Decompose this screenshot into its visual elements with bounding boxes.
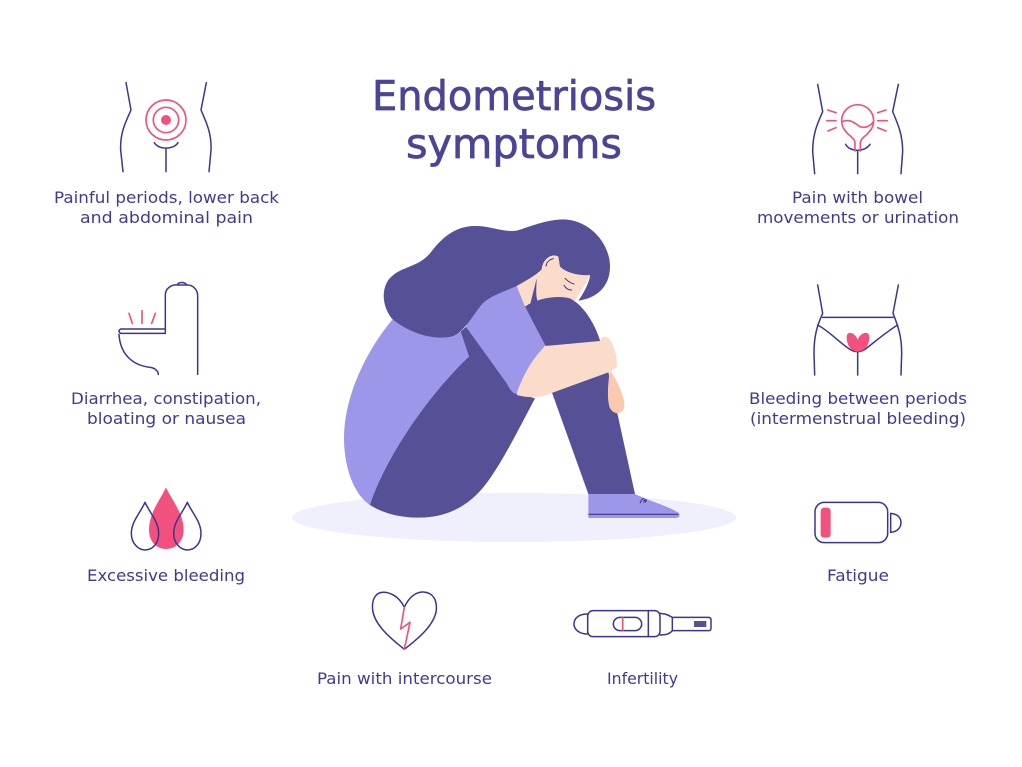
hair (384, 219, 610, 338)
label: painful periods: and abdominal pain (80, 208, 253, 227)
sleeve (466, 277, 546, 394)
label: diarrhea: bloating or nausea (87, 409, 246, 428)
shoe (588, 494, 680, 518)
face (536, 256, 590, 301)
title: Endometriosis (372, 72, 656, 120)
illustration: seated woman (344, 219, 680, 518)
label: excessive bleeding: Excessive bleeding (87, 566, 245, 585)
label: intermenstrual bleeding (749, 389, 967, 428)
neck (513, 267, 540, 307)
label: fatigue: Fatigue (827, 566, 889, 585)
lower leg (552, 372, 635, 494)
label: painful periods: Painful periods, lower back (54, 188, 280, 207)
eyes and ear (546, 259, 574, 290)
shirt back (344, 318, 469, 505)
title: symptoms (406, 120, 622, 168)
label: diarrhea (71, 389, 261, 428)
arm (517, 337, 617, 397)
label: intermenstrual bleeding: Bleeding between periods (749, 389, 967, 408)
icon: toilet (119, 282, 198, 374)
label: pain with intercourse: Pain with intercourse (317, 669, 492, 688)
label: intermenstrual bleeding: (intermenstrual bleeding) (750, 409, 966, 428)
icon: abdominal pain target (121, 83, 211, 172)
label: bowel pain (757, 188, 959, 227)
label: infertility: Infertility (607, 669, 678, 688)
knee (525, 297, 601, 346)
fingers (608, 370, 624, 413)
icon: pregnancy test (574, 611, 711, 637)
label: bowel pain: movements or urination (757, 208, 959, 227)
hair shadow at neck (530, 278, 537, 305)
title (372, 72, 656, 168)
ground shadow (292, 493, 736, 542)
icon: low battery (815, 502, 901, 543)
icon: uterus with pain rays (813, 84, 903, 174)
icon: underwear with blood (814, 285, 902, 375)
label: bowel pain: Pain with bowel (792, 188, 923, 207)
label: painful periods (54, 188, 280, 227)
icon: broken heart (372, 592, 436, 649)
label: diarrhea: Diarrhea, constipation, (71, 389, 261, 408)
icon: blood drops (131, 487, 201, 550)
trousers: back leg (370, 327, 535, 518)
